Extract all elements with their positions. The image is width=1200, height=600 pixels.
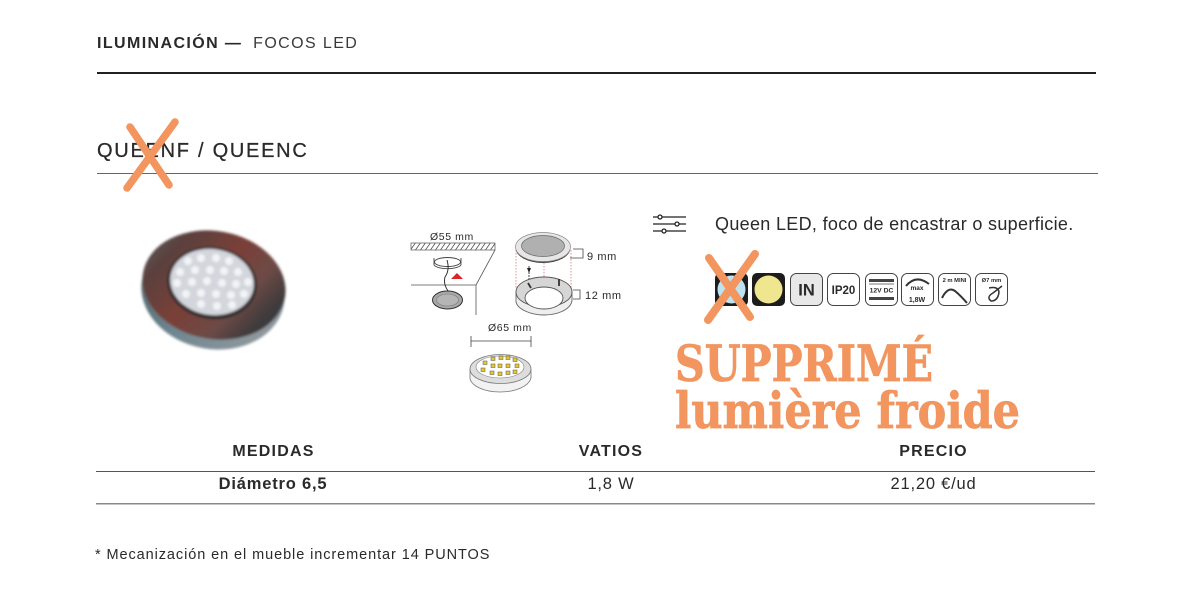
- lower ring: [516, 292, 572, 315]
- top cover: [516, 233, 570, 263]
- icon: settings sliders: [653, 215, 686, 233]
- ring notches: [528, 279, 559, 288]
- 12 mm bracket: [573, 290, 580, 299]
- icon: IP20: IP20: [832, 285, 855, 297]
- diameter 55 mm label: Ø55 mm: [430, 231, 474, 243]
- spot body: [470, 369, 531, 392]
- icon: 7 mm hole: [976, 274, 1008, 306]
- yellow LEDs: [481, 356, 519, 376]
- orange notice text: SUPPRIMÉ: [675, 334, 933, 393]
- icon: max 1,8 W: 1,8W: [909, 297, 926, 304]
- 12 mm label: 12 mm: [585, 290, 622, 302]
- section heading: ILUMINACIÓN — FOCOS LED: [97, 33, 358, 52]
- ceiling hatch: [411, 243, 495, 250]
- title rule: [97, 173, 1098, 174]
- icon: warm light: [752, 273, 785, 306]
- icon: 12V DC: [866, 274, 898, 306]
- icon: 7 mm hole: Ø7 mm: [982, 278, 1001, 284]
- icon: 2 m mini cable: 2 m MINI: [943, 278, 967, 284]
- dimension line: [471, 336, 531, 347]
- installation diagram: [411, 231, 495, 315]
- screw: [528, 266, 530, 280]
- cabinet lines: [411, 250, 495, 315]
- cable: [444, 260, 449, 292]
- icon: max 1,8 W: [902, 274, 934, 306]
- icon: indoor: IN: [798, 282, 815, 300]
- recess cut-out: [434, 258, 461, 269]
- description text: Queen LED, foco de encastrar o superficie.: [715, 214, 1074, 234]
- table header: VATIOS: [579, 443, 643, 460]
- product photo: LED spot: [132, 219, 294, 361]
- surface-mounted spot: [470, 322, 532, 392]
- exploded view: [516, 232, 622, 315]
- table row: 1,8 W: [587, 475, 635, 493]
- icon: cold light: [715, 273, 748, 306]
- small spot: [432, 291, 462, 309]
- icon: IP20: [828, 274, 860, 306]
- table row: [219, 475, 976, 493]
- orange cross over title: [127, 122, 175, 188]
- table header: PRECIO: [899, 443, 968, 460]
- table header: MEDIDAS: [232, 443, 315, 460]
- table rules: [96, 471, 1095, 472]
- icon: indoor: [790, 274, 822, 306]
- orange notice text: [675, 334, 1020, 440]
- icon row: product specification: [715, 273, 1008, 306]
- header rule: [97, 72, 1096, 74]
- table header: [232, 443, 968, 460]
- diameter 65 mm label: Ø65 mm: [488, 322, 532, 334]
- product title: QUEENF / QUEENC: [97, 140, 309, 162]
- table row: 21,20 €/ud: [890, 475, 976, 493]
- orange notice text: lumière froide: [675, 382, 1020, 440]
- icon: 12V DC: 12V DC: [870, 288, 893, 294]
- footnote: * Mecanización en el mueble incrementar 14 PUNTOS: [95, 547, 490, 563]
- red dotted guides: [516, 250, 571, 298]
- icon: max 1,8 W: max: [910, 285, 924, 292]
- orange cross over cold light icon: [708, 254, 755, 320]
- icon: 2 m mini cable: [938, 274, 970, 306]
- 9 mm bracket: [570, 249, 583, 258]
- table: [96, 443, 1095, 504]
- red arrow: [451, 273, 463, 279]
- 9 mm label: 9 mm: [587, 251, 617, 263]
- table row: Diámetro 6,5: [219, 475, 327, 493]
